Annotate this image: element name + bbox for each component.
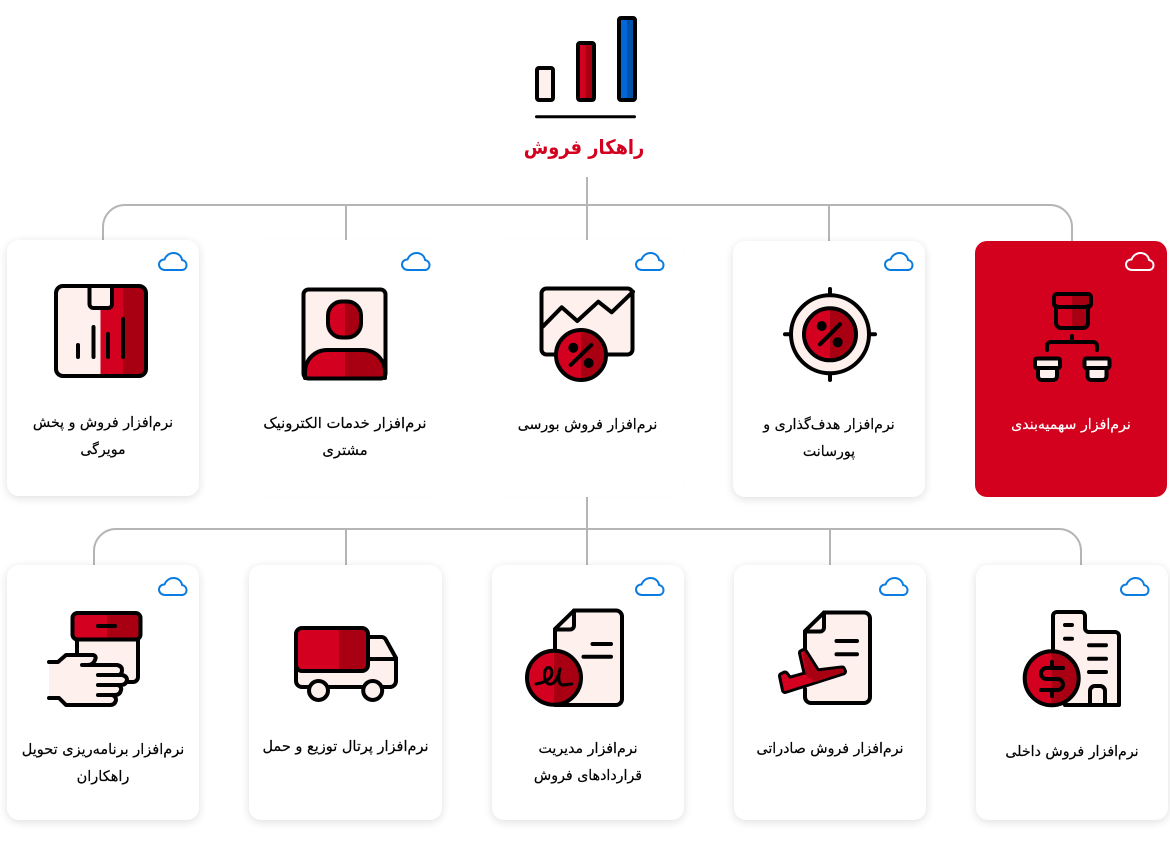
panel: stock-market sales software [491, 240, 684, 496]
icon: package with bars [54, 284, 148, 378]
label: قراردادهای فروش [534, 768, 642, 784]
icon: cloud [158, 252, 188, 271]
label: نرم‌افزار مدیریت [538, 741, 638, 757]
panel: dealer delivery planning software [7, 565, 199, 820]
label: نرم‌افزار برنامه‌ریزی تحویل [22, 742, 184, 758]
icon: hand holding box [47, 611, 142, 707]
label [762, 416, 895, 460]
label: نرم‌افزار فروش داخلی [1005, 744, 1139, 760]
icon: cloud [635, 577, 664, 596]
label [22, 742, 184, 785]
panel: delivery and transport portal software [249, 565, 442, 820]
label: نرم‌افزار سهمیه‌بندی [1011, 417, 1131, 433]
icon: document with airplane [778, 610, 872, 705]
label: نرم‌افزار فروش و پخش [33, 415, 173, 431]
label: نرم‌افزار خدمات الکترونیک [263, 415, 427, 432]
label: پورسانت [803, 444, 855, 460]
title: راهکار فروش [524, 135, 644, 159]
icon: building with dollar [1022, 610, 1121, 708]
icon: truck [294, 626, 398, 702]
label: نرم‌افزار هدف‌گذاری و [763, 417, 895, 433]
panel: export sales software [734, 565, 926, 820]
icon: cloud [401, 252, 430, 271]
label: نرم‌افزار فروش بورسی [518, 417, 657, 433]
icon: chart with percent [540, 286, 636, 382]
icon: bar chart header [535, 16, 637, 118]
panel: target and commission software [733, 241, 925, 497]
label: نرم‌افزار فروش صادراتی [757, 741, 903, 757]
panel: sales contract management software [492, 565, 684, 820]
panel: distribution software [7, 240, 199, 496]
icon: customer profile [302, 288, 388, 380]
panel: domestic sales software [976, 565, 1168, 820]
label: مویرگی [80, 442, 126, 458]
icon: percent target [783, 287, 877, 382]
icon: cloud [158, 577, 188, 596]
label [263, 415, 427, 459]
icon: cloud [1125, 252, 1154, 271]
label: نرم‌افزار پرتال توزیع و حمل [262, 739, 429, 755]
label: راهکاران [77, 769, 129, 785]
icon: signed document [525, 608, 624, 707]
icon: cloud [879, 577, 908, 596]
icon: cloud [1120, 577, 1150, 596]
icon: hierarchy of boxes [1033, 292, 1112, 382]
label [534, 741, 642, 784]
label [33, 415, 173, 458]
panel: quota allocation software (highlighted) [975, 241, 1167, 497]
icon: cloud [635, 252, 664, 271]
label: مشتری [322, 442, 368, 459]
icon: cloud [884, 252, 914, 271]
panel: customer e-services software [249, 240, 441, 496]
